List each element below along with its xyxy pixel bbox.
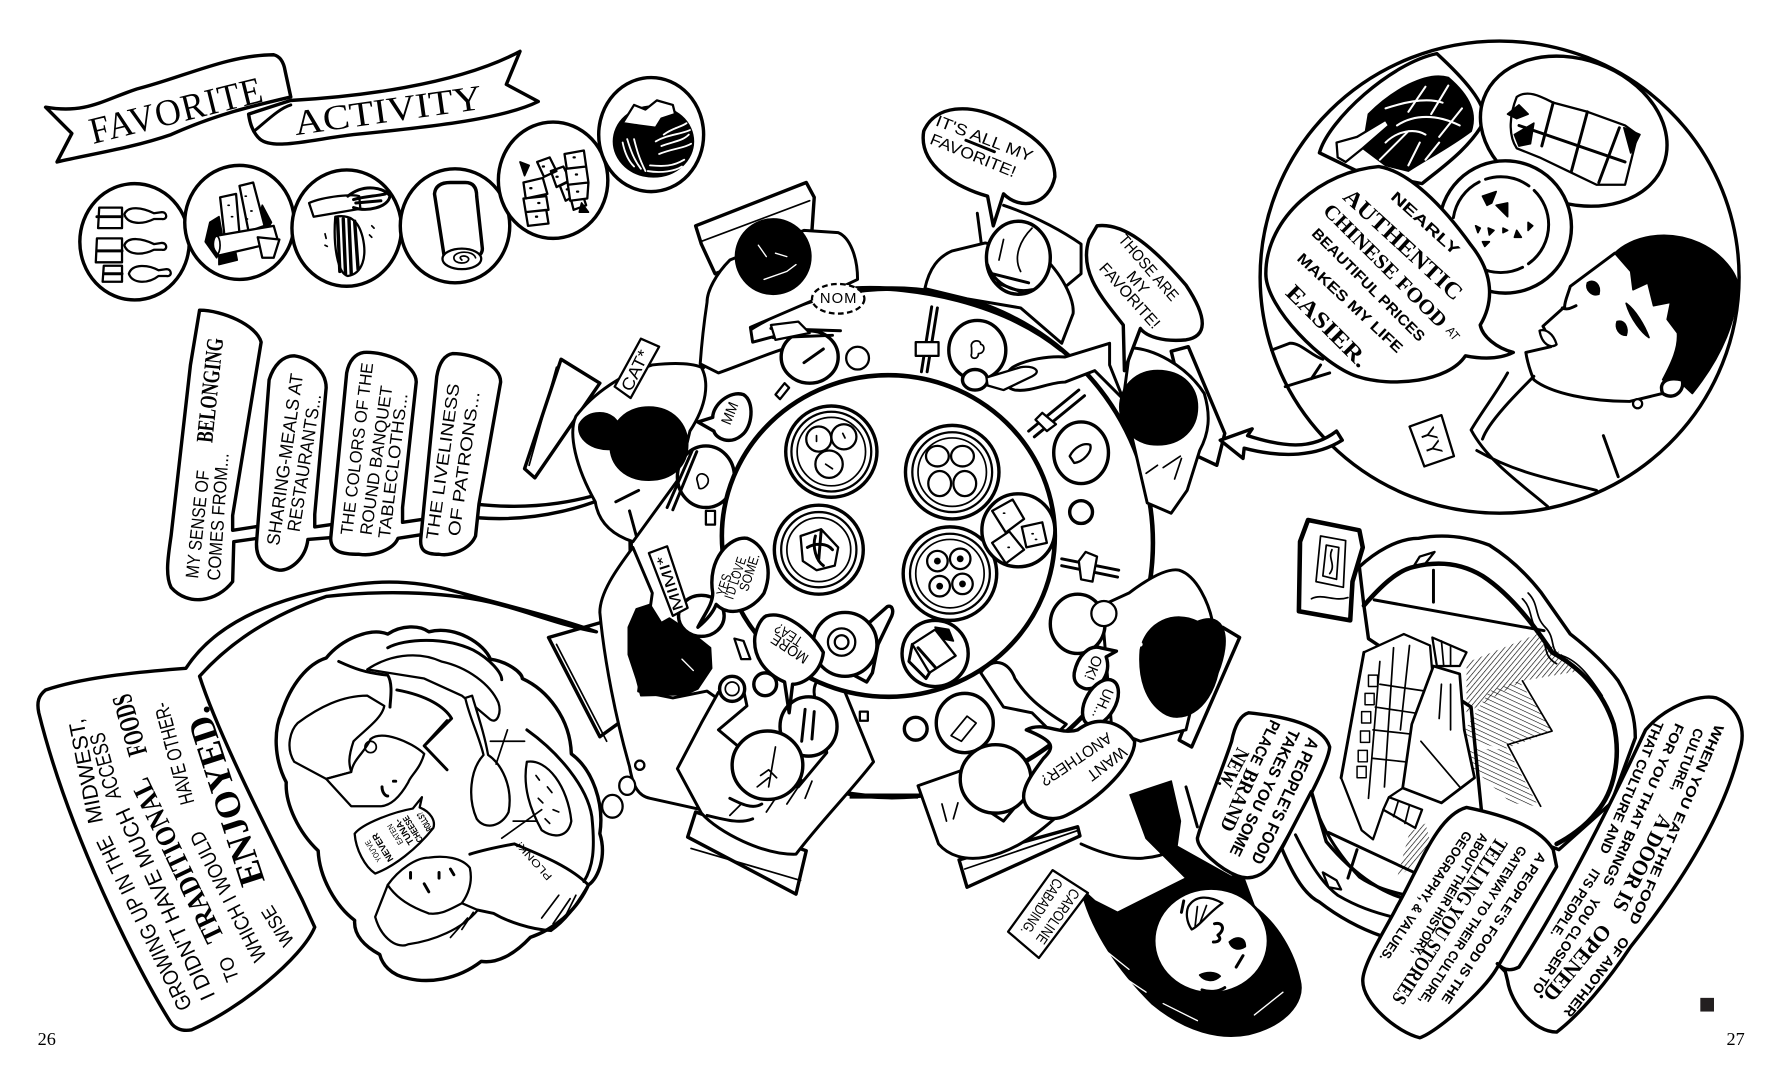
icon: letter N, skewered cubes	[498, 122, 608, 238]
bubble: a people's food takes you some place brand new	[1197, 713, 1330, 878]
portrait: Caroline Cabading	[1008, 781, 1301, 1036]
speech bubble: it's all my favorite: FAVORITE!	[927, 131, 1018, 181]
small speech bubble: tuna cheese rolls: ROLLS?	[415, 810, 434, 833]
teapot	[813, 606, 893, 682]
bubble: a people's food is a gateway, telling you stories: TELLING YOU STORIES	[1387, 833, 1511, 1008]
quote text: TO	[215, 953, 244, 985]
speech bubble: yes I'd love some	[698, 538, 768, 627]
speech bubble: more tea: MORE	[769, 630, 812, 666]
round banquet table	[631, 289, 1153, 797]
small speech bubble: tuna cheese rolls: TUNA-	[392, 817, 416, 847]
arch frame	[1282, 536, 1635, 936]
speech bubble: nearly authentic Chinese food: AT	[1443, 324, 1463, 344]
ship	[1341, 634, 1475, 878]
bubble: my sense of belonging: COMES FROM...	[203, 452, 233, 581]
dish: steamer with buns top left	[786, 406, 877, 497]
bubble: liveliness of patrons	[421, 354, 501, 555]
speech bubble: more tea: TEA?	[772, 619, 806, 649]
speech bubble: yes I'd love some: SOME.	[736, 552, 763, 593]
speech bubble: ok	[1074, 647, 1116, 689]
square end mark	[1700, 998, 1714, 1012]
bubble: sharing meals: RESTAURANTS...	[283, 392, 325, 533]
bubble: when you eat the food of another culture, a door is opened: WHEN YOU EAT THE FOOD	[1626, 722, 1727, 927]
speech bubble: those are my favorite: MY	[1123, 268, 1152, 299]
speech bubble: yes I'd love some: YES,	[714, 569, 736, 598]
speech bubble: nearly authentic Chinese food: CHINESE FOOD	[1318, 200, 1451, 332]
speech bubble: want another: ANOTHER?	[1037, 729, 1114, 789]
bubble: when you eat the food of another culture, a door is opened: ITS PEOPLE.	[1547, 866, 1603, 940]
portrait: YY face and hair	[1272, 235, 1738, 506]
speech bubble: ok: OK!	[1080, 653, 1104, 682]
table edge: top arc	[855, 288, 1062, 350]
quote text: FOODS	[107, 690, 154, 759]
bubble: sharing meals: SHARING-MEALS AT	[262, 372, 307, 547]
speech bubble: more tea	[755, 615, 823, 713]
page number 27: 27	[1727, 1029, 1745, 1049]
icon: letter E, drumsticks and blocks	[80, 184, 189, 300]
speech bubble: nearly authentic Chinese food: NEARLY	[1387, 189, 1462, 259]
speech bubble: nom, dashed	[812, 284, 864, 314]
bubble: colors of the round banquet tablecloths: ROUND BANQUET	[357, 384, 396, 536]
dish: steamer with shumai	[903, 527, 997, 620]
quote text	[63, 690, 299, 1015]
diner: bottom-right guest	[918, 693, 1080, 887]
plaque	[1299, 520, 1363, 620]
speech bubble: uh	[1075, 673, 1126, 732]
speech bubble: it's all my favorite	[923, 109, 1055, 226]
speech bubble: nearly authentic Chinese food: EASIER.	[1281, 280, 1374, 372]
speech bubble: it's all my favorite: IT'S ALL MY	[933, 113, 1036, 166]
table settings: cups, sauce dishes, chopsticks	[706, 307, 1119, 740]
bubble: when you eat the food of another culture, a door is opened: CULTURE,	[1668, 726, 1706, 794]
small speech bubble: tuna cheese rolls: EATEN	[385, 822, 405, 846]
diner: Cat with bun	[525, 359, 734, 542]
speech tail to Cat	[476, 484, 633, 519]
bubble: when you eat the food of another culture, a door is opened: FOR YOU THAT BRINGS	[1600, 721, 1687, 888]
quote text: WHICH I WOULD	[186, 827, 271, 965]
diner: right guest with bun	[981, 570, 1240, 747]
speech bubble: want another: WANT	[1083, 742, 1130, 784]
hatched mountains	[1452, 634, 1582, 806]
speech bubble: nearly authentic Chinese food: AUTHENTIC	[1338, 184, 1468, 305]
quote text: ENJOYED.	[176, 702, 273, 891]
platter of food	[490, 730, 593, 882]
bubble: sharing meals	[256, 356, 351, 570]
speech bubble: nearly authentic Chinese food	[1266, 167, 1513, 382]
quote text: MIDWEST,	[63, 717, 108, 826]
bubble: when you eat the food of another culture, a door is opened: YOU CLOSER TO	[1529, 895, 1603, 997]
speech bubble: yes I'd love some: I'D LOVE	[722, 555, 749, 601]
small speech bubble: tuna cheese rolls	[355, 797, 434, 874]
speech bubble: those are my favorite: THOSE ARE	[1115, 232, 1181, 305]
bubble: my sense of belonging: MY SENSE OF	[181, 469, 213, 579]
label: Cat	[615, 339, 659, 398]
name tag: CABADING.	[1017, 875, 1065, 937]
title banner: Favorite Activity: FAVORITE	[85, 69, 268, 153]
speech bubble: nom, dashed: NOM	[820, 291, 856, 307]
label: Mimi: MIMI*	[654, 553, 687, 613]
bubble: when you eat the food of another culture, a door is opened	[1497, 697, 1742, 1032]
sound effect: plonk: PLONK!	[515, 839, 555, 882]
bubble: liveliness of patrons: OF PATRONS...	[444, 390, 484, 537]
speech bubble: those are my favorite: FAVORITE!	[1095, 260, 1163, 332]
quote text: ACCESS	[84, 730, 126, 803]
speech bubble: nearly authentic Chinese food: BEAUTIFUL PRICES	[1308, 226, 1428, 345]
bubble: a people's food is a gateway, telling you stories: GEOGRAPHY, & VALUES.	[1377, 828, 1475, 964]
small speech bubble: tuna cheese rolls: CHEESE	[401, 814, 425, 844]
label: Cat: CAT*	[618, 347, 654, 394]
bubble: a people's food takes you some place brand new: PLACE	[1246, 717, 1283, 768]
bubble: my sense of belonging: BELONGING	[192, 337, 229, 444]
name tag: CAROLINE	[1032, 885, 1082, 947]
hair and face	[1081, 781, 1301, 1036]
speech bubble: nearly authentic Chinese food: MAKES MY LIFE	[1293, 251, 1405, 357]
bubble: a people's food is a gateway, telling you stories: ABOUT THEIR HISTORY,	[1409, 831, 1491, 959]
panel: my sense of belonging bubbles	[168, 310, 633, 600]
bottom friend	[375, 844, 588, 945]
top friend with spoon	[289, 640, 510, 826]
dish: tofu plate	[982, 494, 1055, 567]
illustration: doorway arch with ship scene	[1282, 520, 1635, 936]
arrow: YY circle to YY at the table	[1220, 429, 1342, 458]
name tag: YY: YY	[1414, 424, 1448, 459]
quote text: TRADITIONAL	[125, 773, 231, 948]
bubble: a people's food takes you some place brand new: BRAND	[1215, 765, 1262, 835]
thought dots	[602, 761, 644, 818]
bubble: a people's food is a gateway, telling you stories: A PEOPLE'S FOOD IS THE	[1438, 850, 1549, 1007]
bubble: liveliness of patrons: THE LIVELINESS	[423, 382, 464, 541]
diner: glasses guest at top	[925, 205, 1081, 343]
icon: letter G, noodle bowl	[599, 78, 704, 192]
page number 26: 26	[38, 1029, 56, 1049]
diner: Mimi, chair and body	[549, 547, 730, 810]
small speech bubble: tuna cheese rolls: YOU'VE	[363, 838, 384, 863]
bubble: when you eat the food of another culture, a door is opened: A DOOR IS	[1608, 811, 1677, 915]
bubble: colors of the round banquet tablecloths: THE COLORS OF THE	[337, 362, 377, 536]
plate: soup	[1439, 161, 1571, 293]
title banner: Favorite Activity: ACTIVITY	[291, 77, 484, 143]
name tag	[1008, 870, 1088, 958]
panel: Midwest memory quote	[38, 582, 596, 1030]
bubble tail and quote box	[38, 582, 596, 1030]
icon row: EATING spelled in food	[80, 78, 704, 300]
dish: cake slice plate	[902, 620, 968, 687]
icon: letter T, greens	[292, 170, 401, 286]
quote text: HAVE OTHER-	[150, 700, 199, 807]
dish: steamer with parcel	[774, 505, 863, 594]
plate: greens	[1319, 54, 1485, 184]
diner: Nom eating with chopsticks	[696, 182, 869, 383]
speech bubble: want another	[1024, 721, 1135, 819]
table edge: left lower and bottom arcs	[850, 794, 918, 798]
dish: steamer with dumplings top right	[905, 425, 999, 519]
small speech bubble: tuna cheese rolls: NEVER	[370, 831, 395, 864]
quote text: GROWING UP IN THE	[91, 833, 197, 1015]
name tag: YY	[1410, 415, 1454, 466]
bubble: colors of the round banquet tablecloths	[331, 352, 428, 555]
bubble: a people's food takes you some place brand new: TAKES YOU SOME	[1226, 726, 1302, 859]
bubble: a people's food takes you some place brand new: A PEOPLE'S FOOD	[1247, 735, 1322, 867]
diner: bottom-left man with tea	[677, 676, 874, 894]
bubble: my sense of belonging	[168, 310, 274, 600]
title banner: Favorite Activity	[46, 51, 538, 162]
speech bubble: mm: MM	[719, 400, 742, 427]
bubble: colors of the round banquet tablecloths: TABLECLOTHS...	[375, 392, 412, 539]
quote text: WISE	[257, 902, 299, 950]
diner: YY reaching with spoon	[949, 320, 1225, 513]
bubble: when you eat the food of another culture, a door is opened: THAT CULTURE AND	[1597, 719, 1666, 856]
bubble: a people's food is a gateway, telling you stories: GATEWAY TO THEIR CULTURE,	[1416, 843, 1530, 1007]
speech bubble: those are my favorite	[1086, 225, 1202, 371]
speech bubble: mm	[698, 394, 751, 440]
speech bubble: uh: UH...	[1088, 686, 1116, 721]
bubble: when you eat the food of another culture, a door is opened: OPENED.	[1535, 919, 1616, 1010]
bubble: a people's food takes you some place brand new: NEW.	[1213, 744, 1253, 793]
bubble: a people's food is a gateway, telling you stories	[1363, 807, 1557, 1038]
table: lazy susan centre	[722, 375, 1055, 697]
quote text: I DIDN'T HAVE MUCH	[110, 804, 220, 1004]
bubble: when you eat the food of another culture, a door is opened: OF ANOTHER	[1561, 934, 1632, 1020]
icon: letter I, spiral roll	[400, 169, 510, 283]
label: Mimi	[649, 546, 688, 616]
icon: letter A, rolled food	[185, 165, 294, 279]
thought cloud: memory of school lunch	[276, 627, 644, 980]
plate: rolls	[1459, 31, 1688, 231]
panel: YY portrait circle	[1260, 31, 1739, 513]
